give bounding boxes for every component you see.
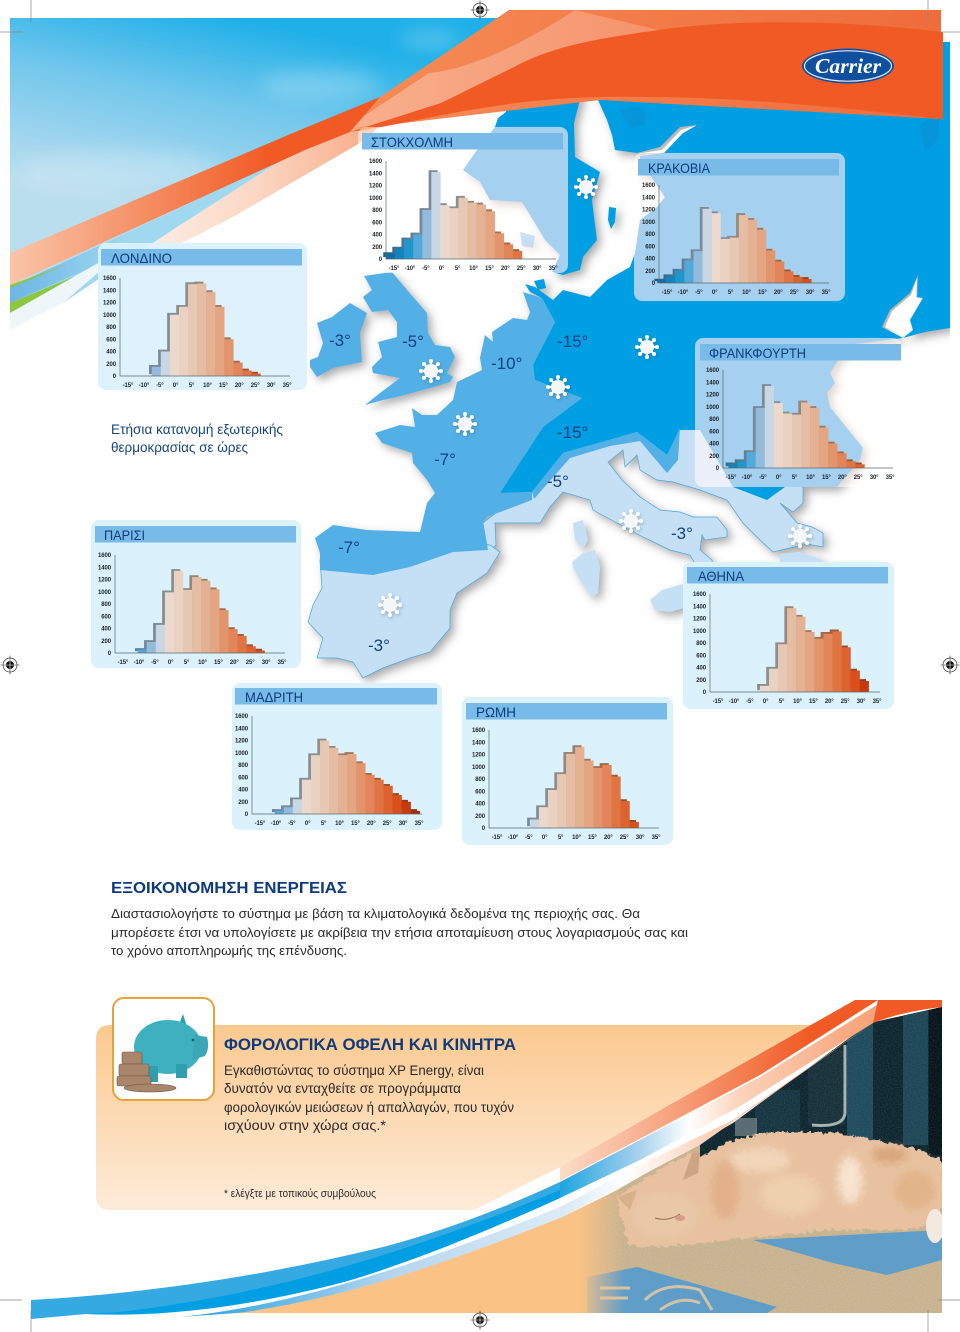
bar chart: Madrid: 400	[238, 788, 249, 794]
bar chart: London: -5°	[156, 383, 164, 389]
bar chart: London	[103, 276, 292, 389]
orange header swoosh	[10, 10, 943, 285]
bar chart: Paris	[98, 553, 287, 666]
bar chart: London: 25°	[251, 383, 260, 389]
bar chart: Rome: -15°	[492, 835, 503, 841]
bar chart: Krakow: 1600	[642, 183, 656, 189]
text block: energy saving body: Διαστασιολογήστε το σύστημα με βάση τα κλιματολογικά δεδομένα της περιοχής σας. Θα	[111, 906, 641, 921]
bar chart: Rome: 0	[482, 826, 486, 832]
bar chart: Paris: -10°	[134, 660, 145, 666]
bar chart: Stockholm: 1200	[369, 184, 383, 190]
bar chart: Rome: 800	[475, 777, 486, 783]
left ribbons under the orange band	[10, 85, 430, 330]
heading: Stockholm: ΣΤΟΚΧΟΛΜΗ	[371, 134, 453, 150]
text block: tax benefits body: ισχύουν στην χώρα σας.*	[224, 1118, 387, 1133]
heading: tax benefits: ΦΟΡΟΛΟΓΙΚΑ ΟΦΕΛΗ ΚΑΙ ΚΙΝΗΤΡΑ	[224, 1035, 516, 1054]
bar chart: Krakow: -10°	[678, 290, 689, 296]
bar chart: Krakow: 35°	[822, 290, 831, 296]
bar chart: Paris: 35°	[278, 660, 287, 666]
bar chart: Rome	[472, 728, 661, 841]
bar chart: Madrid: 200	[238, 800, 249, 806]
bar chart: Krakow: -5°	[695, 290, 703, 296]
bar chart: London: 1000	[103, 313, 117, 319]
bar chart: Paris: 25°	[246, 660, 255, 666]
temperature labels	[329, 331, 693, 655]
bar chart: Madrid: 600	[238, 775, 249, 781]
bar chart: Paris: 800	[101, 602, 112, 608]
temperature labels: -5°	[402, 332, 424, 351]
bar chart: Stockholm: 10°	[469, 266, 479, 272]
bar chart: London: -10°	[139, 383, 150, 389]
bar chart: Frankfurt: 25°	[854, 475, 863, 481]
bar chart: Krakow: 5°	[728, 290, 734, 296]
bar chart: London: 1400	[103, 288, 117, 294]
bar chart: Krakow: 20°	[774, 290, 783, 296]
bar chart: Athens: -10°	[729, 699, 740, 705]
bar chart: Athens: 400	[696, 666, 707, 672]
bar chart: Frankfurt: -15°	[726, 475, 737, 481]
bar chart: Athens: -5°	[746, 699, 754, 705]
bar chart: Rome: 35°	[652, 835, 661, 841]
bar chart: Madrid: 1200	[235, 738, 249, 744]
bar chart: Rome: 600	[475, 789, 486, 795]
bar chart: Stockholm: 1600	[369, 159, 383, 165]
bar chart: Stockholm: 0°	[439, 266, 445, 272]
bar chart: Frankfurt: 1200	[706, 392, 720, 398]
bar chart: Rome: 0°	[542, 835, 548, 841]
bar chart: Madrid: 0°	[305, 821, 311, 827]
bar chart: Paris: 0	[108, 651, 112, 657]
bar chart: Stockholm: 25°	[517, 266, 526, 272]
bar chart: Athens: 30°	[857, 699, 866, 705]
bar chart: Madrid: -10°	[271, 821, 282, 827]
bar chart: Paris: 10°	[198, 660, 208, 666]
bar chart: Paris: 5°	[184, 660, 190, 666]
bar chart: Stockholm: 800	[372, 208, 383, 214]
bar chart: Rome: -10°	[508, 835, 519, 841]
bar chart: London: 200	[106, 362, 117, 368]
bar chart: Frankfurt: 0	[716, 466, 720, 472]
text block: energy saving body	[111, 906, 688, 958]
bar chart: Stockholm: 5°	[455, 266, 461, 272]
temperature labels: -7°	[434, 450, 456, 469]
photo: cat sleeping by radiator	[578, 1000, 944, 1315]
bar chart: Athens: 25°	[841, 699, 850, 705]
bar chart: Frankfurt: 1400	[706, 380, 720, 386]
caption: annual distribution	[111, 421, 283, 455]
bar chart: London: 1200	[103, 300, 117, 306]
snowflake icons	[378, 175, 812, 617]
bar chart: Rome: 30°	[636, 835, 645, 841]
logo: Carrier	[802, 48, 894, 84]
temperature labels: -3°	[329, 331, 351, 350]
temperature labels: -10°	[491, 354, 522, 373]
text block: tax benefits body: Εγκαθιστώντας το σύστημα XP Energy, είναι	[224, 1063, 484, 1078]
bar chart: Madrid: 10°	[335, 821, 345, 827]
bar chart: Rome: 10°	[572, 835, 582, 841]
bar chart: Rome: 15°	[588, 835, 597, 841]
bar chart: Frankfurt: 1600	[706, 368, 720, 374]
bar chart: London: 800	[106, 325, 117, 331]
bar chart: Athens: -15°	[713, 699, 724, 705]
bar chart: Rome: 20°	[604, 835, 613, 841]
caption: annual distribution: Ετήσια κατανομή εξωτερικής	[111, 421, 283, 437]
bar chart: Rome: 200	[475, 814, 486, 820]
bar chart: Paris: 1400	[98, 565, 112, 571]
text block: tax benefits body: φορολογικών μειώσεων ή απαλλαγών, που τυχόν	[224, 1100, 514, 1115]
bar chart: Stockholm: 0	[379, 257, 383, 263]
bar chart: Frankfurt: 800	[709, 417, 720, 423]
bar chart: Krakow: 600	[645, 244, 656, 250]
bar chart: Stockholm: 400	[372, 232, 383, 238]
bar chart: Frankfurt: 10°	[806, 475, 816, 481]
bar chart: London: -15°	[123, 383, 134, 389]
bar chart: Stockholm: 30°	[533, 266, 542, 272]
bar chart: Krakow: 15°	[758, 290, 767, 296]
footnote: * ελέγξτε με τοπικούς συμβούλους	[224, 1188, 376, 1200]
bar chart: Stockholm: 600	[372, 220, 383, 226]
text block: energy saving body: μπορέσετε έτσι να υπολογίσετε με ακρίβεια την ετήσια αποταμίευση στους λογαριασμούς σας και	[111, 925, 688, 940]
bar chart: Krakow: 10°	[742, 290, 752, 296]
bar chart: London: 20°	[235, 383, 244, 389]
temperature labels: -7°	[338, 538, 360, 557]
bar chart: Krakow	[642, 183, 831, 296]
bar chart: Paris: 200	[101, 639, 112, 645]
temperature labels: -15°	[557, 332, 588, 351]
bar chart: Krakow: 25°	[790, 290, 799, 296]
bar chart: Paris: 1200	[98, 578, 112, 584]
temperature labels: -3°	[671, 524, 693, 543]
bar chart: Madrid: 5°	[321, 821, 327, 827]
bar chart: London: 400	[106, 350, 117, 356]
bar chart: Rome: -5°	[525, 835, 533, 841]
bar chart: Frankfurt: 400	[709, 442, 720, 448]
bar chart: Frankfurt: 35°	[886, 475, 895, 481]
bar chart: Rome: 1200	[472, 752, 486, 758]
bar chart: Frankfurt: -10°	[742, 475, 753, 481]
caption: annual distribution: θερμοκρασίας σε ώρες	[111, 439, 248, 455]
bar chart: Frankfurt: 200	[709, 454, 720, 460]
bar chart: Paris: 30°	[262, 660, 271, 666]
heading: Athens: ΑΘΗΝΑ	[698, 568, 745, 584]
bar chart: Madrid: 20°	[367, 821, 376, 827]
bar chart: Paris: -5°	[151, 660, 159, 666]
bar chart: Rome: 1400	[472, 740, 486, 746]
ribbons across bottom	[31, 1000, 942, 1319]
bar chart: London: 0	[113, 374, 117, 380]
bar chart: Athens: 5°	[779, 699, 785, 705]
bar chart: Rome: 1000	[472, 765, 486, 771]
bar chart: Frankfurt: 15°	[822, 475, 831, 481]
bar chart: Rome: 25°	[620, 835, 629, 841]
bar chart: London: 10°	[203, 383, 213, 389]
bar chart: Krakow: 0°	[712, 290, 718, 296]
bar chart: London: 1600	[103, 276, 117, 282]
bar chart: Stockholm: -15°	[389, 266, 400, 272]
bar chart: Krakow: -15°	[662, 290, 673, 296]
bar chart: Madrid: 800	[238, 763, 249, 769]
bar chart: Frankfurt: 1000	[706, 405, 720, 411]
map of Europe with temperature zones	[308, 20, 960, 678]
bar chart: Stockholm: 1400	[369, 171, 383, 177]
peach corner below ribbons	[237, 1190, 640, 1313]
logo: Carrier: Carrier	[815, 54, 882, 78]
panel: Athens chart	[683, 562, 894, 709]
bar chart: Athens: 800	[696, 641, 707, 647]
bar chart: London: 30°	[267, 383, 276, 389]
bar chart: Madrid: -5°	[288, 821, 296, 827]
heading: Rome: ΡΩΜΗ	[476, 704, 516, 720]
bar chart: Paris: 20°	[230, 660, 239, 666]
bar chart: London: 15°	[219, 383, 228, 389]
bar chart: London: 0°	[173, 383, 179, 389]
temperature labels: -3°	[368, 636, 390, 655]
bar chart: Frankfurt: 20°	[838, 475, 847, 481]
panel: Frankfurt chart	[695, 338, 901, 487]
bar chart: Stockholm: 15°	[485, 266, 494, 272]
bar chart: Krakow: 800	[645, 232, 656, 238]
heading: energy saving: ΕΞΟΙΚΟΝΟΜΗΣΗ ΕΝΕΡΓΕΙΑΣ	[111, 880, 347, 897]
heading: London: ΛΟΝΔΙΝΟ	[111, 250, 172, 266]
text block: tax benefits body: δυνατόν να ενταχθείτε σε προγράμματα	[224, 1081, 461, 1096]
bar chart: Madrid	[235, 714, 424, 827]
bar chart: Athens: 200	[696, 678, 707, 684]
bar chart: Stockholm: -5°	[422, 266, 430, 272]
bar chart: Krakow: 1400	[642, 195, 656, 201]
bar chart: Krakow: 1200	[642, 208, 656, 214]
bar chart: Madrid: 30°	[399, 821, 408, 827]
bar chart: London: 600	[106, 337, 117, 343]
panel: Paris chart	[91, 520, 301, 668]
bar chart: Paris: -15°	[118, 660, 129, 666]
temperature labels: -5°	[547, 472, 569, 491]
bar chart: Krakow: 400	[645, 256, 656, 262]
bar chart: Athens: 1000	[693, 629, 707, 635]
bar chart: Frankfurt	[706, 368, 895, 481]
bar chart: Krakow: 30°	[806, 290, 815, 296]
bar chart: Athens: 1200	[693, 616, 707, 622]
bar chart: Stockholm: 35°	[549, 266, 558, 272]
bar chart: Madrid: 25°	[383, 821, 392, 827]
bar chart: Paris: 600	[101, 614, 112, 620]
bar chart: Frankfurt: -5°	[759, 475, 767, 481]
temperature labels: -15°	[557, 423, 588, 442]
panel: Madrid chart	[232, 683, 442, 830]
text block: energy saving body: το χρόνο αποπληρωμής της επένδυσης.	[111, 943, 347, 958]
bar chart: Stockholm: 20°	[501, 266, 510, 272]
bar chart: Paris: 15°	[214, 660, 223, 666]
bar chart: Madrid: 0	[245, 812, 249, 818]
bar chart: Madrid: 15°	[351, 821, 360, 827]
bar chart: London: 35°	[283, 383, 292, 389]
bar chart: Frankfurt: 30°	[870, 475, 879, 481]
bar chart: Athens	[693, 592, 882, 705]
bar chart: Stockholm: -10°	[405, 266, 416, 272]
bar chart: London: 5°	[189, 383, 195, 389]
bar chart: Paris: 400	[101, 626, 112, 632]
icon: piggy bank with coins	[113, 998, 214, 1100]
bar chart: Athens: 35°	[873, 699, 882, 705]
panel: London chart	[98, 243, 307, 390]
bar chart: Madrid: 1000	[235, 751, 249, 757]
bar chart: Krakow: 0	[652, 281, 656, 287]
bar chart: Athens: 0	[703, 690, 707, 696]
bar chart: Athens: 10°	[793, 699, 803, 705]
bar chart: Krakow: 200	[645, 269, 656, 275]
bar chart: Madrid: 35°	[415, 821, 424, 827]
bar chart: Frankfurt: 600	[709, 429, 720, 435]
bar chart: Athens: 1600	[693, 592, 707, 598]
bar chart: Krakow: 1000	[642, 220, 656, 226]
bar chart: Frankfurt: 5°	[792, 475, 798, 481]
bar chart: Rome: 5°	[558, 835, 564, 841]
heading: Krakow: ΚΡΑΚΟΒΙΑ	[648, 160, 711, 176]
bar chart: Madrid: 1400	[235, 726, 249, 732]
sky background	[10, 18, 525, 325]
bar chart: Athens: 600	[696, 653, 707, 659]
bar chart: Madrid: 1600	[235, 714, 249, 720]
bar chart: Paris: 1600	[98, 553, 112, 559]
panel: Rome chart	[462, 697, 673, 845]
bar chart: Paris: 1000	[98, 590, 112, 596]
heading: Paris: ΠΑΡΙΣΙ	[104, 527, 145, 543]
heading: Madrid: ΜΑΔΡΙΤΗ	[245, 689, 303, 705]
bar chart: Stockholm: 200	[372, 245, 383, 251]
panel: Krakow chart	[634, 153, 845, 301]
bar chart: Rome: 1600	[472, 728, 486, 734]
bar chart: Stockholm	[369, 159, 558, 272]
bar chart: Athens: 20°	[825, 699, 834, 705]
bar chart: Athens: 15°	[809, 699, 818, 705]
text block: tax benefits body	[224, 1063, 514, 1133]
bar chart: Stockholm: 1000	[369, 196, 383, 202]
bar chart: Athens: 0°	[763, 699, 769, 705]
bar chart: Frankfurt: 0°	[776, 475, 782, 481]
bar chart: Madrid: -15°	[255, 821, 266, 827]
panel: Stockholm chart	[358, 127, 568, 273]
bar chart: Rome: 400	[475, 802, 486, 808]
bar chart: Athens: 1400	[693, 604, 707, 610]
heading: Frankfurt: ΦΡΑΝΚΦΟΥΡΤΗ	[709, 345, 806, 361]
bar chart: Paris: 0°	[168, 660, 174, 666]
panel: tax benefits background	[96, 1025, 826, 1210]
